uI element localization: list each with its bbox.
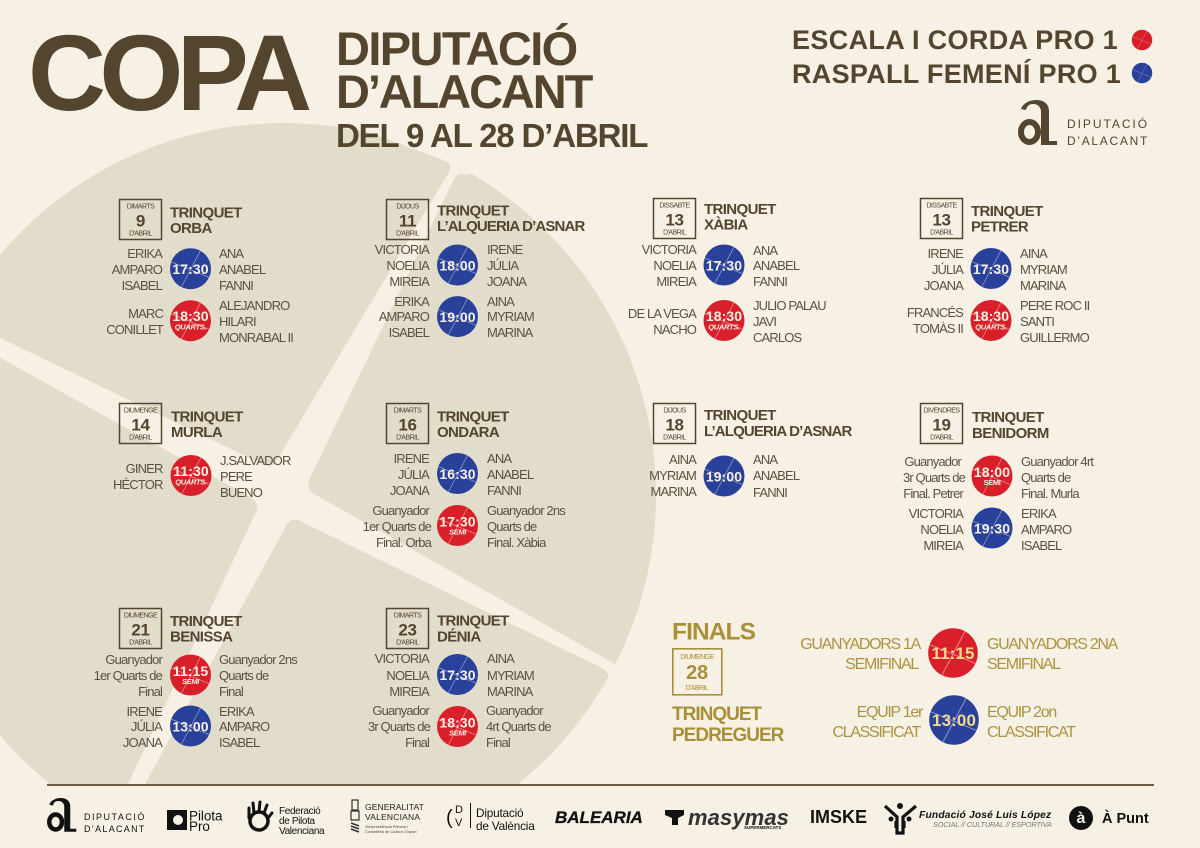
time: 18:00: SEMI <box>983 478 1001 487</box>
panel: 21 abril Benissa <box>94 608 298 750</box>
footer rule <box>47 784 1154 786</box>
venue: TRINQUET <box>971 203 1043 220</box>
date box: D'ABRIL <box>129 230 153 238</box>
panel: 19 abril Benidorm: ERIKA <box>1021 506 1057 521</box>
time: 13:00 <box>929 695 979 745</box>
time: 13:00: 13:00 <box>172 718 209 734</box>
panel: 9 abril Orba: ANA <box>219 246 244 261</box>
panel: 16 abril Ondara: 1er Quarts de <box>363 519 432 534</box>
date box: DIVENDRES <box>924 408 960 414</box>
venue: TRINQUET <box>170 204 242 222</box>
date box: D'ABRIL <box>686 685 709 692</box>
time: 11:15 <box>170 654 211 696</box>
teams: MARINA <box>651 484 697 499</box>
time: 11:15: 11:15 <box>173 663 208 679</box>
teams: Guanyador <box>904 454 963 469</box>
panel: 13 abril Xàbia: JULIO PALAU <box>753 298 826 313</box>
teams: SEMIFINAL <box>845 656 919 673</box>
date box: DIUMENGE <box>124 612 158 620</box>
time: 18:30: 18:30 <box>706 308 742 324</box>
title: Diputació d'Alacant: D’ALACANT <box>336 65 594 118</box>
venue: ONDARA <box>437 424 500 441</box>
date box <box>386 404 428 444</box>
sponsor: Pilota Pro: Pro <box>189 819 210 834</box>
time: 17:30: 17:30 <box>973 261 1009 277</box>
panel: 21 abril Benissa: Quarts de <box>219 668 269 683</box>
panel: 19 abril Benidorm: ISABEL <box>1021 538 1062 553</box>
time: 17:30: SEMI <box>449 528 467 536</box>
panel: 11 abril L'Alqueria: ISABEL <box>389 325 430 340</box>
time: 19:00: 19:00 <box>439 309 476 325</box>
panel: finals: EQUIP 2on <box>987 704 1056 721</box>
panel: 16 abril Ondara: Quarts de <box>487 519 537 534</box>
time: 17:30: 17:30 <box>706 257 742 273</box>
venue: L’ALQUERIA D’ASNAR <box>437 218 585 235</box>
venue: TRINQUET <box>972 409 1044 426</box>
venue: TRINQUET <box>437 202 509 220</box>
title: Diputació d'Alacant <box>336 22 594 118</box>
panel: 16 abril Ondara: ANA <box>487 451 512 466</box>
panel: 21 abril Benissa: ERIKA <box>219 704 255 719</box>
teams: MIREIA <box>656 274 697 289</box>
panel: 23 abril Dénia: Guanyador <box>372 703 431 718</box>
panel: 21 abril Benissa: IRENE <box>127 704 163 719</box>
panel: 11 abril L'Alqueria: AMPARO <box>379 309 430 324</box>
sponsor: Diputació d'Alacant: D’ALACANT <box>84 824 146 834</box>
panel: 18 abril L'Alqueria: ANA <box>753 452 778 467</box>
date box: 14 <box>131 416 150 434</box>
venue: XÀBIA <box>704 216 748 234</box>
sponsor: IMSKE: IMSKE <box>810 807 867 827</box>
time: 16:30: 16:30 <box>439 466 476 482</box>
venue: L’ALQUERIA D’ASNAR <box>704 423 852 440</box>
panel: 19 abril Benidorm: Final. Murla <box>1021 486 1080 501</box>
sponsor: Diputació de València: Diputació <box>476 806 524 820</box>
teams: NOELIA <box>386 668 430 683</box>
venue: PETRER <box>971 218 1029 236</box>
venue: MURLA <box>171 424 223 441</box>
panel: 13 abril Petrer: AINA <box>1020 246 1048 261</box>
time: 17:30: 17:30 <box>439 667 476 683</box>
panel: 13 abril Petrer: TOMÀS II <box>913 321 963 336</box>
date box: 21 <box>131 620 150 640</box>
date box: 9 <box>136 212 145 230</box>
sponsor: Federació de Pilota Valenciana <box>249 802 325 837</box>
panel: 13 abril Xàbia: CARLOS <box>753 330 803 345</box>
time: 18:30 <box>437 706 478 747</box>
panel: finals: EQUIP 1er <box>857 704 924 721</box>
time: 18:00 <box>437 244 478 286</box>
title: COPA: COPA <box>28 12 310 133</box>
logo: Diputació d'Alacant: DIPUTACIÓ <box>1067 116 1149 131</box>
sponsor: Diputació de València: de València <box>476 819 535 833</box>
panel: 16 abril Ondara: Final. Xàbia <box>487 535 547 550</box>
subtitle: dates: DEL 9 AL 28 D’ABRIL <box>336 117 648 154</box>
panel: 9 abril Orba: MONRABAL II <box>219 330 293 345</box>
date box: DISSABTE <box>926 202 957 210</box>
time: 13:00: 13:00 <box>932 711 976 730</box>
background pelota ball <box>0 100 700 784</box>
date box: 28 <box>686 662 708 684</box>
date box <box>920 404 962 444</box>
logo: Diputació d'Alacant: D’ALACANT <box>1067 134 1149 148</box>
panel: 23 abril Dénia: MYRIAM <box>487 668 534 683</box>
sponsor: Fundació José Luis López: Fundació José Luis López <box>919 810 1052 821</box>
venue: ORBA <box>170 220 212 237</box>
time: 18:00 <box>972 456 1012 496</box>
time: 17:30 <box>437 654 478 695</box>
panel: 13 abril Xàbia: JAVI <box>753 314 776 329</box>
panel: finals: GUANYADORS 2NA <box>987 636 1119 653</box>
teams: GUANYADORS 1A <box>800 636 922 653</box>
panel: finals <box>672 618 1119 746</box>
time: 18:00: 18:00 <box>974 464 1010 480</box>
time: 18:30 <box>704 300 744 341</box>
date box: D'ABRIL <box>129 640 153 646</box>
sponsor: Masymas: masymas <box>688 805 789 830</box>
sponsor: Generalitat Valenciana <box>351 800 424 834</box>
time: 11:15: SEMI <box>182 677 200 686</box>
teams: MIREIA <box>389 274 430 289</box>
panel: 13 abril Xàbia: DE LA VEGA <box>628 306 697 321</box>
panel: 23 abril Dénia <box>368 608 551 750</box>
date box <box>120 404 162 444</box>
time: 19:00 <box>437 296 478 337</box>
sponsor: Federació de Pilota Valenciana: Valenciana <box>279 826 325 837</box>
time: 11:30: QUARTS. <box>175 477 207 486</box>
sponsor: Fundació José Luis López <box>885 803 1052 833</box>
teams: IRENE <box>394 451 430 466</box>
sponsor: Federació de Pilota Valenciana: Federació <box>279 806 321 817</box>
teams: JOANA <box>390 483 430 498</box>
sponsor: Fundació José Luis López: SOCIAL // CULTURAL // ESPORTIVA <box>933 820 1052 829</box>
panel: 9 abril Orba: MARC <box>128 306 163 321</box>
date box: 11 <box>399 212 416 230</box>
teams: JOANA <box>924 278 964 293</box>
teams: ISABEL <box>122 278 163 293</box>
teams: NOELIA <box>653 258 697 273</box>
panel: 11 abril L'Alqueria: MYRIAM <box>487 309 534 324</box>
sponsor: À Punt: À Punt <box>1102 810 1149 827</box>
date box: D'ABRIL <box>396 640 420 646</box>
panel: 13 abril Petrer: GUILLERMO <box>1020 330 1090 345</box>
venue: TRINQUET <box>437 408 509 426</box>
sponsor: Generalitat Valenciana: Conselleria de Cultura i Esport <box>365 830 417 834</box>
venue: BENIDORM <box>972 425 1049 442</box>
time: 17:30: 17:30 <box>172 261 209 277</box>
heading: finals: FINALS <box>672 618 756 646</box>
date box <box>673 649 722 695</box>
teams: 1er Quarts de <box>94 668 163 683</box>
panel: 21 abril Benissa: JÚLIA <box>131 719 163 734</box>
date box: D'ABRIL <box>663 434 687 442</box>
time: 19:00 <box>704 456 744 496</box>
sponsor: Diputació de València: D <box>455 804 463 816</box>
date box <box>120 200 162 240</box>
time: 18:30: SEMI <box>449 728 467 738</box>
venue: TRINQUET <box>704 201 776 218</box>
venue: PEDREGUER <box>672 725 785 746</box>
panel: 19 abril Benidorm: AMPARO <box>1021 522 1072 537</box>
icon: red ball <box>1132 30 1152 50</box>
date box <box>920 198 962 238</box>
panel: 11 abril L'Alqueria: ERIKA <box>394 294 430 309</box>
panel: 13 abril Xàbia: FANNI <box>753 274 787 289</box>
teams: JÚLIA <box>932 262 964 277</box>
panel: 21 abril Benissa: JOANA <box>123 735 163 750</box>
sponsor: Diputació d'Alacant <box>49 798 146 834</box>
logo: Diputació d'Alacant <box>1021 100 1149 148</box>
panel: 19 abril Benidorm: NOELIA <box>920 522 964 537</box>
panel: 16 abril Ondara: Guanyador 2ns <box>487 503 566 518</box>
time: 17:30 <box>437 505 478 546</box>
time: 18:30: 18:30 <box>172 308 209 324</box>
panel: 13 abril Petrer: SANTI <box>1020 314 1054 329</box>
time: 17:30 <box>970 248 1012 289</box>
legend: RASPALL FEMENÍ PRO 1 <box>792 58 1121 89</box>
panel: 9 abril Orba: CONILLET <box>106 322 164 337</box>
time: 11:15: 11:15 <box>931 644 975 663</box>
sponsor: Generalitat Valenciana: VALENCIANA <box>365 812 420 822</box>
teams: HÉCTOR <box>113 477 163 492</box>
panel: 16 abril Ondara: Final. Orba <box>376 535 433 550</box>
sponsor: Diputació d'Alacant: DIPUTACIÓ <box>84 812 146 822</box>
teams: Guanyador <box>105 652 164 667</box>
icon: blue ball <box>1132 63 1152 83</box>
date box: DIUMENGE <box>680 654 715 661</box>
panel: finals: CLASSIFICAT <box>987 724 1076 741</box>
panel: 21 abril Benissa: Guanyador 2ns <box>219 652 298 667</box>
date box: 13 <box>932 210 951 230</box>
time: 18:00: 18:00 <box>439 257 476 273</box>
panel: 11 abril L'Alqueria: IRENE <box>487 242 524 257</box>
time: 16:30 <box>437 453 478 494</box>
time: 11:30: 11:30 <box>173 463 209 479</box>
teams: 3r Quarts de <box>903 470 966 485</box>
sponsor: À Punt: à <box>1077 810 1086 827</box>
panel: 23 abril Dénia: Final <box>405 735 430 750</box>
panel: 23 abril Dénia: MARINA <box>487 684 534 699</box>
sponsor: Pilota Pro: Pilota <box>189 808 223 824</box>
panel: 19 abril Benidorm: Guanyador 4rt <box>1021 454 1094 469</box>
sponsor: À Punt <box>1069 806 1149 830</box>
panel: 19 abril Benidorm <box>903 404 1094 553</box>
date box <box>120 608 162 648</box>
panel: 11 abril L'Alqueria <box>375 200 585 340</box>
time: 19:00: 19:00 <box>706 468 742 484</box>
date box: DIMARTS <box>394 612 422 620</box>
panel: 16 abril Ondara: ANABEL <box>487 467 534 482</box>
panel: 23 abril Dénia: Final <box>486 735 511 750</box>
panel: 16 abril Ondara: FANNI <box>487 483 521 498</box>
date box: D'ABRIL <box>930 230 954 236</box>
panel: 14 abril Murla: BUENO <box>220 485 263 500</box>
panel: 14 abril Murla: J.SALVADOR <box>220 453 291 468</box>
panel: finals: CLASSIFICAT <box>832 724 922 741</box>
date box: 19 <box>932 416 951 434</box>
time: 13:00 <box>170 706 211 746</box>
panel: 18 abril L'Alqueria: FANNI <box>753 485 787 500</box>
date box: D'ABRIL <box>663 230 687 236</box>
time: 18:30 <box>970 300 1012 341</box>
panel: 9 abril Orba: ANABEL <box>219 262 266 277</box>
time: 19:30: 19:30 <box>974 520 1010 536</box>
panel: 21 abril Benissa: AMPARO <box>219 719 270 734</box>
panel: 13 abril Xàbia: ANA <box>753 243 778 258</box>
panel: 9 abril Orba: ALEJANDRO <box>219 298 290 313</box>
teams: NOELIA <box>386 258 430 273</box>
panel: 13 abril Petrer: PERE ROC II <box>1020 298 1090 313</box>
panel: 13 abril Xàbia: NACHO <box>653 322 697 337</box>
venue: TRINQUET <box>704 407 776 424</box>
panel: 18 abril L'Alqueria: ANABEL <box>753 468 800 483</box>
panel: 11 abril L'Alqueria: AINA <box>487 294 515 309</box>
date box: DIUMENGE <box>124 408 158 414</box>
date box: DISSABTE <box>659 202 690 210</box>
date box: DIJOUS <box>396 204 420 210</box>
panel: 9 abril Orba: FANNI <box>219 278 253 293</box>
sponsor: Diputació de València <box>446 803 535 833</box>
teams: VICTORIA <box>375 651 430 666</box>
teams: MIREIA <box>389 684 430 699</box>
time: 17:30 <box>170 248 211 289</box>
time: 18:30: QUARTS. <box>708 322 740 331</box>
teams: Final. Petrer <box>903 486 965 501</box>
legend: ESCALA I CORDA PRO 1 <box>792 25 1118 55</box>
time: 18:30: 18:30 <box>439 714 476 730</box>
date box: D'ABRIL <box>129 434 153 442</box>
panel: 23 abril Dénia: AINA <box>487 651 515 666</box>
venue: TRINQUET <box>437 612 509 630</box>
time: 18:30: 18:30 <box>973 308 1009 324</box>
date box <box>386 200 428 240</box>
sponsor: Federació de Pilota Valenciana: de Pilota <box>279 816 316 827</box>
panel: 16 abril Ondara <box>363 404 566 550</box>
sponsor: Generalitat Valenciana: GENERALITAT <box>365 802 424 812</box>
venue: BENISSA <box>170 628 233 646</box>
sponsor: Diputació de València: ( <box>446 807 453 829</box>
sponsor: Generalitat Valenciana: Vicepresidència Primera i <box>365 825 408 829</box>
teams: MYRIAM <box>649 468 696 483</box>
panel: 19 abril Benidorm: VICTORIA <box>909 506 964 521</box>
title: Diputació d'Alacant: DIPUTACIÓ <box>336 22 577 75</box>
legend <box>792 25 1152 89</box>
teams: AINA <box>669 452 697 467</box>
panel: 23 abril Dénia: 4rt Quarts de <box>486 719 551 734</box>
teams: ERIKA <box>127 246 163 261</box>
date box <box>654 404 696 444</box>
date box: DIMARTS <box>127 204 155 210</box>
panel: finals: SEMIFINAL <box>987 656 1061 673</box>
time: 18:30 <box>170 300 211 341</box>
venue: TRINQUET <box>170 613 242 630</box>
venue: TRINQUET <box>171 408 243 426</box>
sponsor: Pilota Pro <box>167 808 223 834</box>
panel: 13 abril Petrer: MYRIAM <box>1020 262 1067 277</box>
panel: 13 abril Petrer <box>907 198 1090 345</box>
panel: 13 abril Petrer: FRANCÉS <box>907 305 964 320</box>
panel: 13 abril Petrer: MARINA <box>1020 278 1067 293</box>
venue: DÉNIA <box>437 628 481 646</box>
panel: 21 abril Benissa: Final <box>219 684 244 699</box>
panel: 13 abril Xàbia <box>628 198 826 345</box>
teams: AMPARO <box>112 262 163 277</box>
time: 11:30 <box>170 455 212 496</box>
date box: 13 <box>665 210 684 230</box>
time: 18:30: QUARTS. <box>975 322 1007 331</box>
panel: 11 abril L'Alqueria: JÚLIA <box>487 258 519 273</box>
teams: GINER <box>126 461 163 476</box>
teams: VICTORIA <box>642 242 697 257</box>
panel: 14 abril Murla <box>113 404 291 500</box>
time: 18:30: QUARTS. <box>175 323 206 332</box>
panel: 14 abril Murla: PERE <box>220 469 253 484</box>
teams: JÚLIA <box>398 467 430 482</box>
time: 19:30 <box>972 508 1012 548</box>
date box: DIMARTS <box>394 408 422 414</box>
sponsor: Masymas: SUPERMERCATS <box>744 825 781 830</box>
date box: 16 <box>398 416 417 434</box>
panel: 19 abril Benidorm: Quarts de <box>1021 470 1071 485</box>
teams: VICTORIA <box>375 242 430 257</box>
panel: 21 abril Benissa: ISABEL <box>219 735 260 750</box>
date box: 23 <box>398 620 417 640</box>
sponsor: Diputació de València: V <box>455 817 463 829</box>
date box: DIJOUS <box>663 408 687 414</box>
panel: 18 abril L'Alqueria <box>649 404 852 500</box>
teams: IRENE <box>928 246 964 261</box>
date box: D'ABRIL <box>396 434 420 442</box>
panel: 23 abril Dénia: 3r Quarts de <box>368 719 431 734</box>
date box <box>386 608 428 648</box>
panel: 16 abril Ondara: Guanyador <box>372 503 431 518</box>
panel: 11 abril L'Alqueria: JOANA <box>487 274 527 289</box>
time: 17:30 <box>704 244 744 286</box>
date box <box>654 198 696 238</box>
panel: 11 abril L'Alqueria: MARINA <box>487 325 534 340</box>
panel: 13 abril Xàbia: ANABEL <box>753 258 800 273</box>
panel: 19 abril Benidorm: MIREIA <box>923 538 964 553</box>
panel: 23 abril Dénia: Guanyador <box>486 703 544 718</box>
panel: 9 abril Orba <box>106 200 293 345</box>
venue: TRINQUET <box>672 704 762 725</box>
sponsor: Balearia: BALEARIA <box>555 808 643 827</box>
date box: D'ABRIL <box>396 230 420 238</box>
teams: Final <box>138 684 163 699</box>
date box: D'ABRIL <box>930 434 954 442</box>
time: 11:15 <box>928 628 978 678</box>
time: 17:30: 17:30 <box>439 514 476 530</box>
panel: 9 abril Orba: HILARI <box>219 314 256 329</box>
date box: 18 <box>665 416 684 434</box>
